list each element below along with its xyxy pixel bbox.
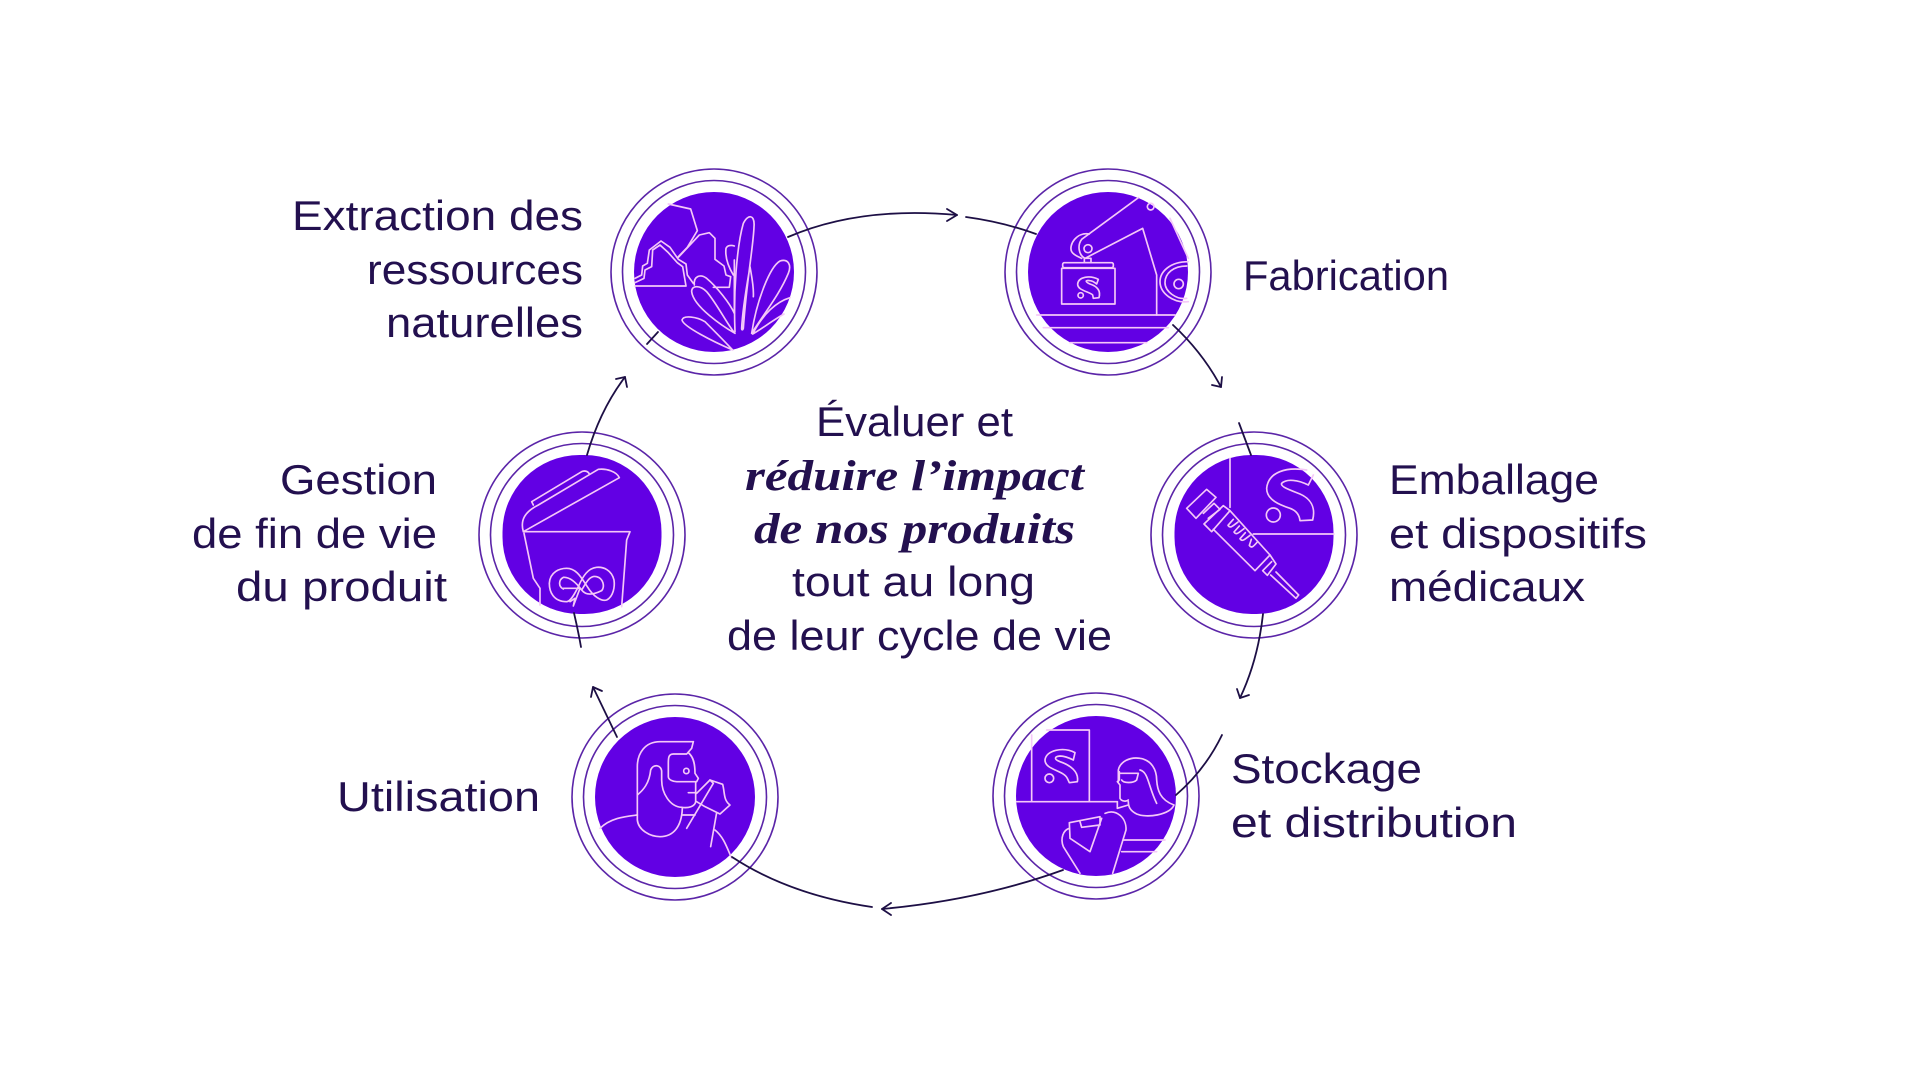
arrow: storage to use [882,735,1222,915]
label: gestion de fin de vie [192,456,447,610]
central heading [727,398,1112,659]
arrow: use to end of life [591,687,872,907]
icon: manufacturing robot arm [1005,169,1211,375]
label: emballage: Emballage [1389,456,1599,503]
icon: person using inhaler [572,694,778,900]
label: fabrication: Fabrication [1243,252,1449,299]
label: emballage: médicaux [1389,563,1585,610]
icon: extraction of natural resources [611,169,817,375]
label: extraction: Extraction des [292,192,583,239]
central heading: de nos produits [754,506,1075,553]
label: extraction [292,192,583,346]
label: emballage: et dispositifs [1389,510,1647,557]
arrow: packaging to storage [1237,423,1263,698]
central heading: tout au long [792,558,1035,605]
arrow: end of life to extraction [574,332,658,647]
arrow: fabrication to packaging [966,217,1222,387]
icon: packaging and syringe [1151,432,1357,638]
label: stockage: et distribution [1231,799,1517,846]
central heading: de leur cycle de vie [727,612,1112,659]
label: gestion de fin de vie: Gestion [280,456,437,503]
icon: storage and distribution worker [993,693,1199,899]
label: stockage [1231,745,1517,846]
central heading: réduire l’impact [745,453,1086,500]
label: extraction: naturelles [386,299,583,346]
label: gestion de fin de vie: de fin de vie [192,510,437,557]
central heading: Évaluer et [816,398,1013,445]
arrow: extraction to fabrication [788,209,957,237]
label: emballage [1389,456,1647,610]
label: gestion de fin de vie: du produit [236,563,447,610]
label: extraction: ressources [367,246,583,293]
icon: recycling bin end of life [479,432,685,638]
label: utilisation: Utilisation [337,773,540,820]
label: stockage: Stockage [1231,745,1422,792]
